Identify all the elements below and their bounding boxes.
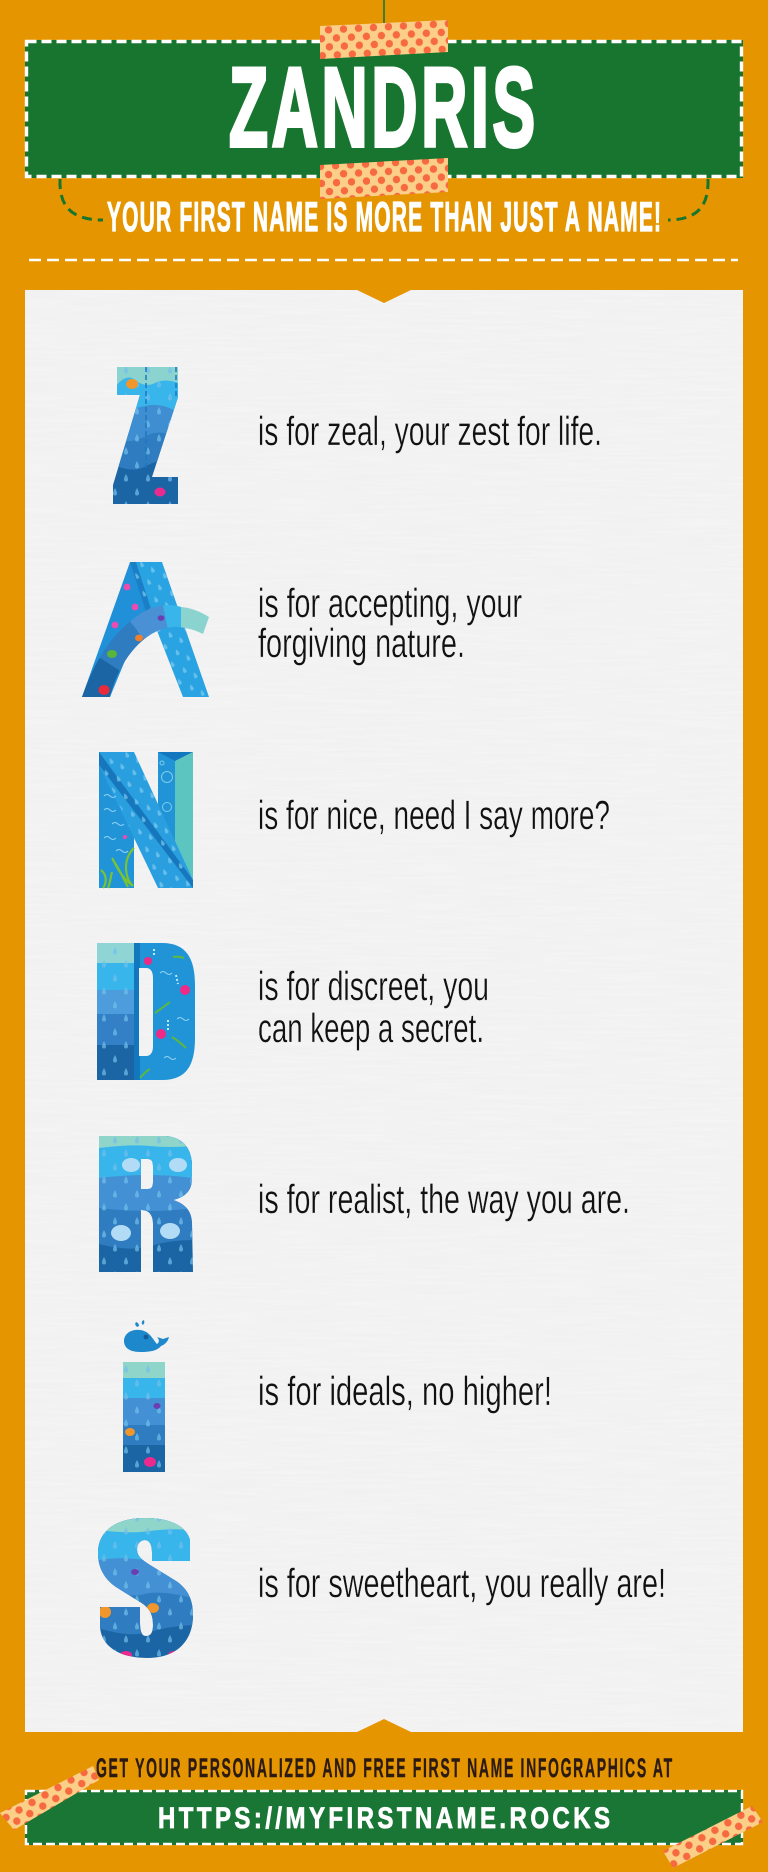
snowflake marks xyxy=(160,761,172,812)
letter R xyxy=(99,1136,193,1272)
footer banner xyxy=(25,1790,743,1845)
rainbow arc xyxy=(82,605,209,697)
text: Z: is for zeal, your zest for life. xyxy=(258,408,602,454)
letter A xyxy=(82,562,209,697)
text: N: is for nice, need I say more? xyxy=(258,792,610,838)
tape: footer right xyxy=(663,1806,763,1868)
text: A: is for accepting, your xyxy=(258,580,522,626)
fish group xyxy=(125,1403,160,1467)
whales xyxy=(111,1158,187,1241)
bubbles and weed xyxy=(154,947,178,1030)
text: D xyxy=(258,963,489,1051)
tape: footer left xyxy=(0,1766,99,1830)
text: A: forgiving nature. xyxy=(258,620,465,666)
tape: banner top xyxy=(320,20,448,59)
panel notch: top xyxy=(357,290,411,303)
jellyfish xyxy=(144,957,190,1039)
wave marks xyxy=(104,794,128,852)
whale above I xyxy=(124,1320,169,1352)
dashed divider xyxy=(29,259,738,261)
title banner xyxy=(25,40,743,178)
text: D: is for discreet, you xyxy=(258,963,489,1009)
fish group xyxy=(99,1569,180,1659)
subtitle: YOUR FIRST NAME IS MORE THAN JUST A NAME! xyxy=(107,194,661,241)
panel: letters xyxy=(25,290,743,1732)
letter Z xyxy=(113,367,178,504)
text: I: is for ideals, no higher! xyxy=(258,1368,552,1414)
footer call to action: GET YOUR PERSONALIZED AND FREE FIRST NAME INFOGRAPHICS AT xyxy=(96,1753,672,1783)
text: D: can keep a secret. xyxy=(258,1005,484,1051)
starfish trio xyxy=(112,584,138,628)
letter N xyxy=(99,752,193,888)
fish: orange xyxy=(126,379,138,389)
wave marks xyxy=(160,972,189,1060)
dashed connector: right xyxy=(668,179,708,220)
letter D xyxy=(97,943,195,1080)
tape: banner bottom xyxy=(320,158,448,199)
footer url: HTTPS://MYFIRSTNAME.ROCKS xyxy=(158,1800,610,1835)
text: A xyxy=(258,580,522,666)
hanging string xyxy=(383,0,385,25)
fish: pink xyxy=(154,488,166,496)
title: ZANDRIS xyxy=(229,45,535,171)
panel notch: bottom xyxy=(357,1719,411,1732)
letter I xyxy=(123,1362,165,1472)
pink dot xyxy=(123,835,127,839)
letter S xyxy=(98,1518,193,1659)
dashed connector: left xyxy=(60,179,103,220)
arc fish xyxy=(98,615,164,695)
seaweed xyxy=(101,848,134,888)
